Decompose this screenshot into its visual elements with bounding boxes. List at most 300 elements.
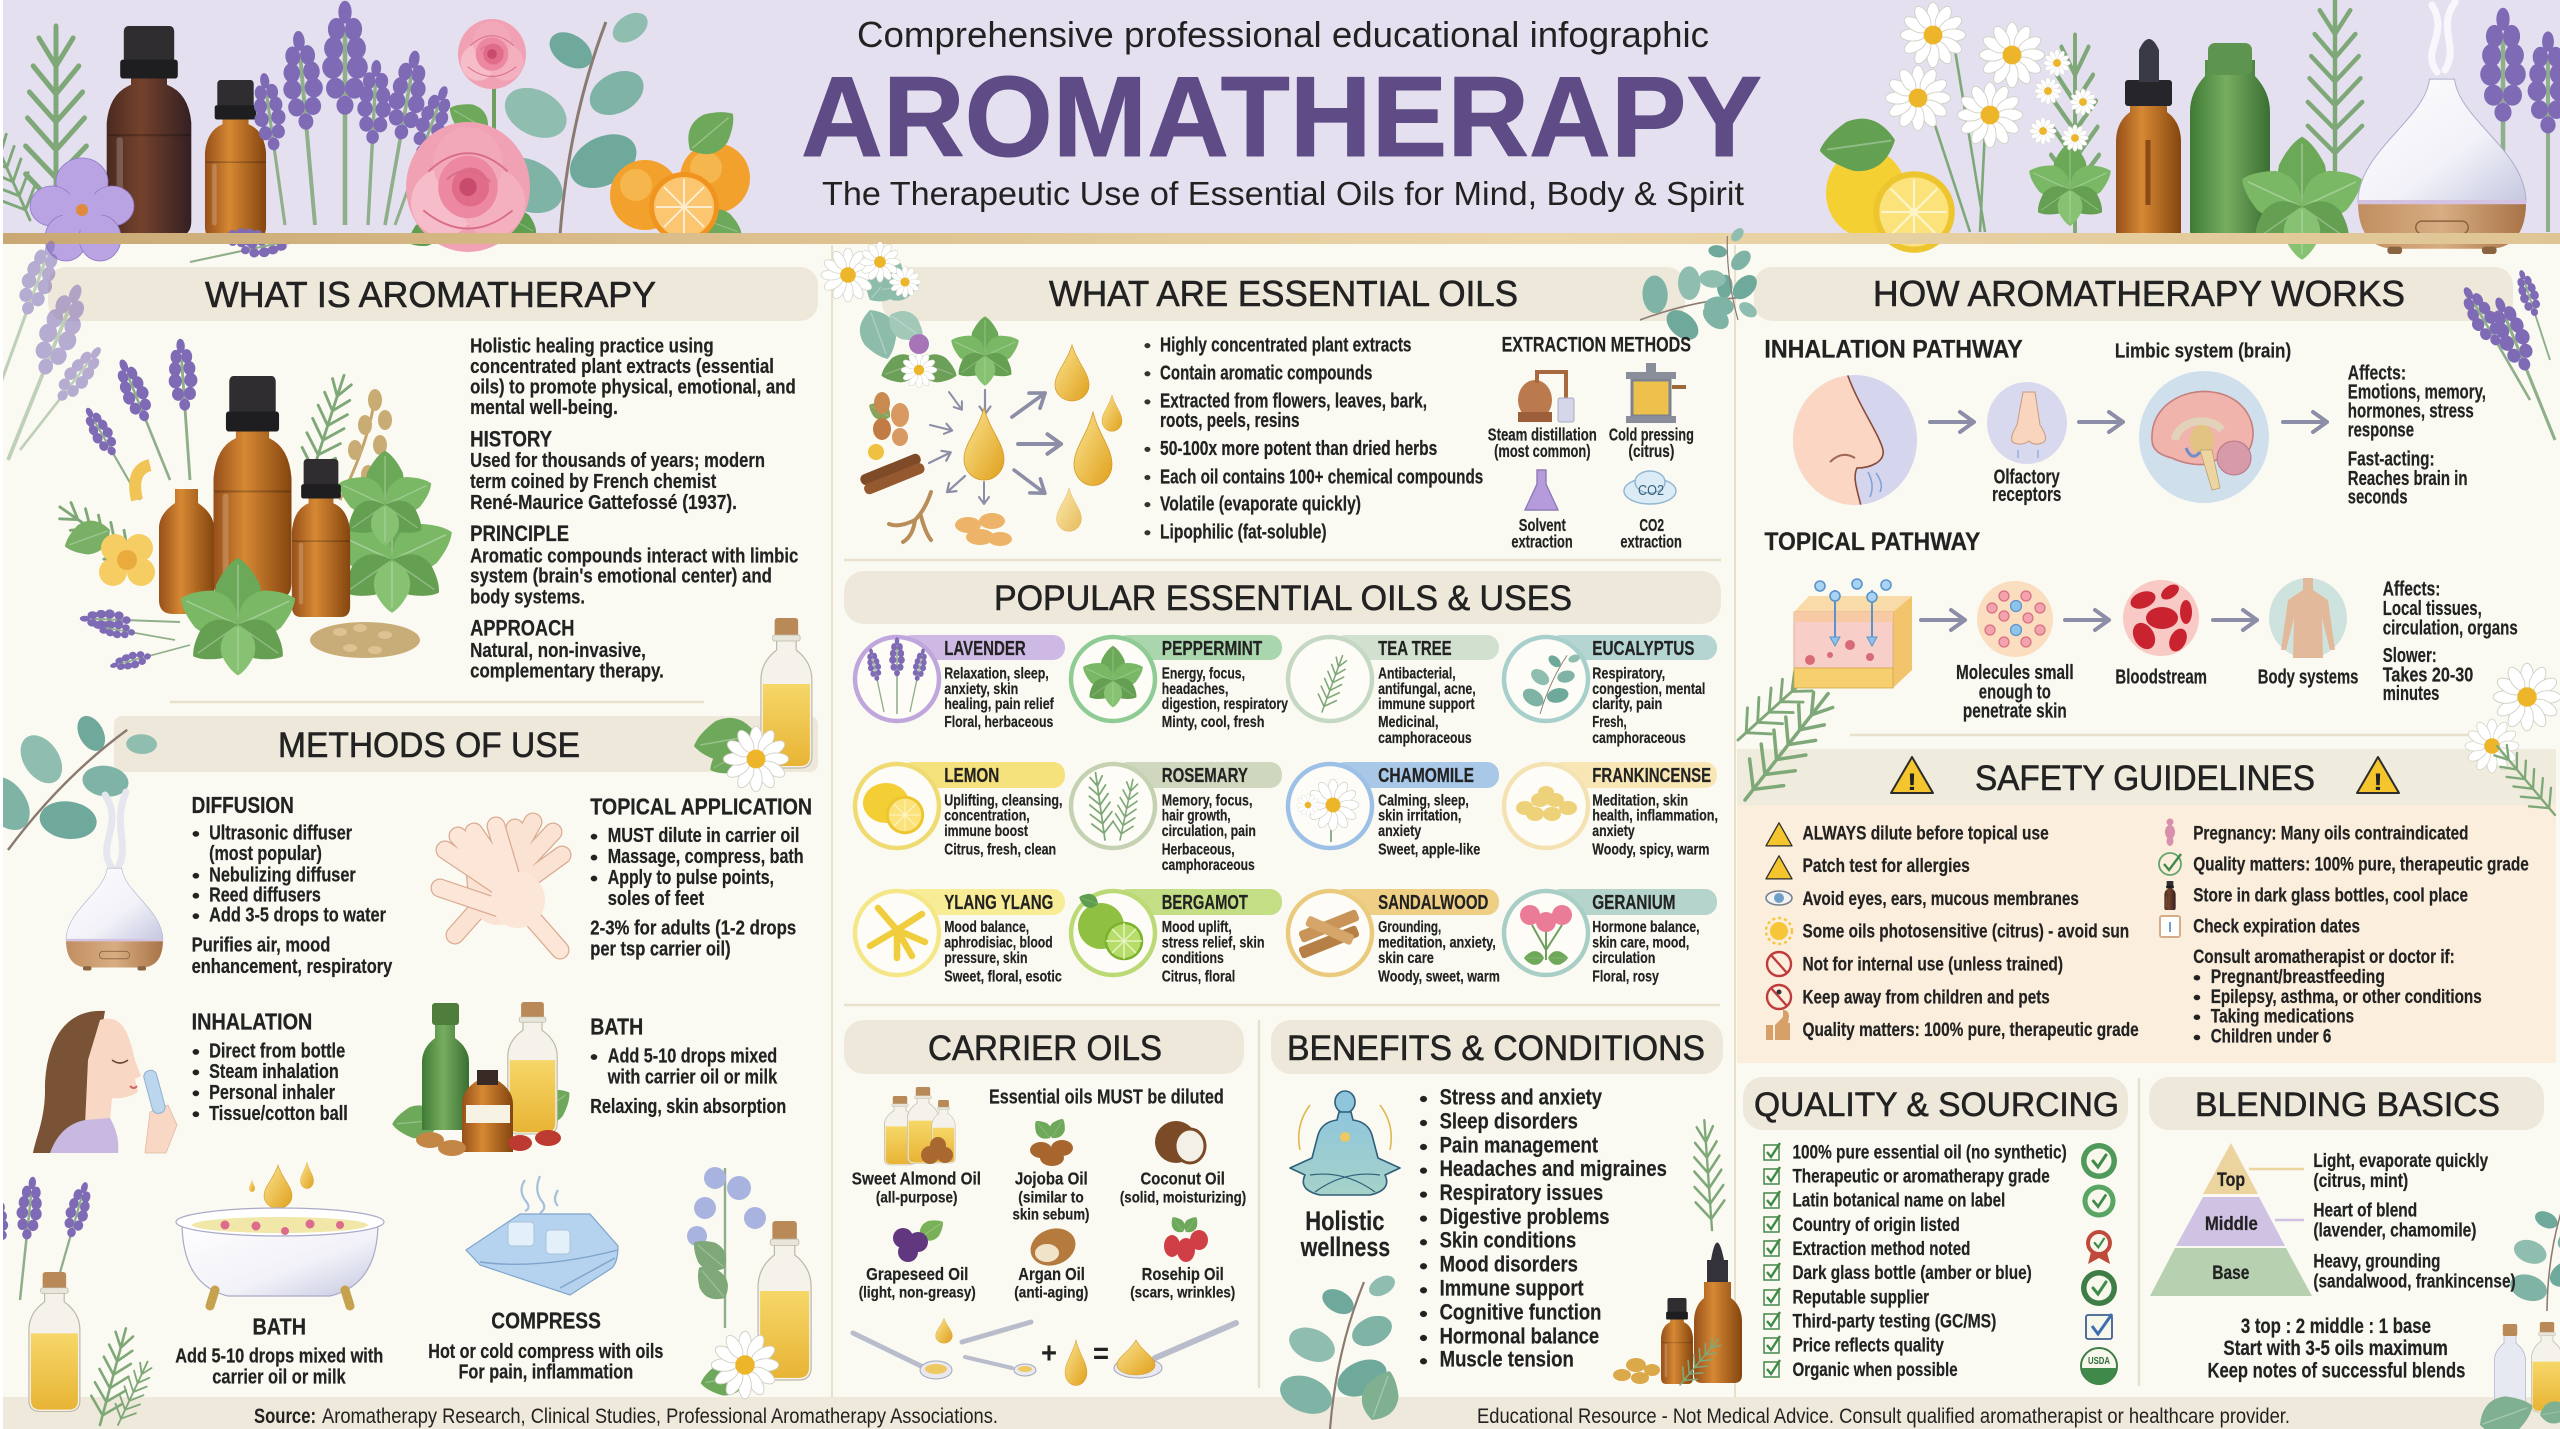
section heading: safety guidelines: SAFETY GUIDELINES	[1975, 759, 2315, 798]
card text: tea tree	[1378, 637, 1476, 747]
benefits text: Stress and anxiety	[1440, 1084, 1602, 1109]
pathway labels: seconds	[2348, 485, 2408, 508]
card text: frankincense	[1592, 764, 1718, 858]
text block: definition, history, principle, approach: HISTORY	[470, 427, 552, 452]
card text: lemon: Uplifting, cleansing,	[944, 791, 1062, 809]
blending text: (lavender, chamomile)	[2313, 1218, 2476, 1241]
blending text: Heavy, grounding	[2313, 1249, 2440, 1272]
main title: AROMATHERAPY	[801, 54, 1762, 181]
footer disclaimer: Educational Resource - Not Medical Advice. Consult qualified aromatherapist or healthcare provider.	[1477, 1405, 2290, 1428]
method: topical application: Massage, compress, bath	[608, 845, 804, 868]
card text: ylang ylang: Sweet, floral, esotic	[944, 967, 1062, 985]
card text: chamomile: anxiety	[1378, 822, 1421, 840]
card text: frankincense: Woody, spicy, warm	[1592, 840, 1709, 858]
pathway labels: receptors	[1992, 483, 2061, 505]
panel: carrier oils	[852, 1086, 1246, 1386]
card text: rosemary: Herbaceous,	[1162, 840, 1235, 858]
extraction labels: (citrus)	[1628, 443, 1674, 462]
section heading: safety guidelines	[1891, 757, 2399, 798]
text block: definition, history, principle, approach: term coined by French chemist	[470, 470, 717, 492]
card text: bergamot: conditions	[1162, 949, 1224, 967]
arrow	[2079, 412, 2123, 432]
icon: molecules	[1977, 581, 2053, 657]
icon: lavender	[864, 637, 930, 714]
card text: tea tree: TEA TREE	[1378, 637, 1452, 659]
carrier oil labels: (light, non-greasy)	[859, 1283, 976, 1301]
safety text: Avoid eyes, ears, mucous membranes	[1803, 887, 2079, 909]
panel: blending basics	[2150, 1143, 2516, 1383]
icon: eucalyptus	[1517, 643, 1582, 720]
pathway labels: Molecules small	[1956, 661, 2074, 683]
checklist text: Therapeutic or aromatherapy grade	[1792, 1164, 2050, 1187]
text block: definition, history, principle, approach: oils) to promote physical, emotional, and	[470, 375, 796, 398]
extraction labels: EXTRACTION METHODS	[1502, 332, 1691, 356]
safety text: Keep away from children and pets	[1803, 986, 2050, 1008]
card text: tea tree: immune support	[1378, 695, 1475, 713]
card text: lavender: Floral, herbaceous	[944, 713, 1053, 731]
topical pathway diagram	[1794, 578, 2347, 688]
card text: eucalyptus: clarity, pain	[1592, 695, 1662, 713]
dilution diagram: spoons: +	[1041, 1337, 1057, 1370]
extraction labels: Cold pressing	[1609, 426, 1694, 445]
card text: eucalyptus: Fresh,	[1592, 713, 1627, 731]
icon: three oil bottles	[884, 1087, 955, 1165]
card text: bergamot: BERGAMOT	[1162, 891, 1248, 913]
card text: lemon: Citrus, fresh, clean	[944, 840, 1056, 858]
icon: chamomile	[1297, 779, 1359, 842]
section heading: quality and sourcing: QUALITY & SOURCING	[1754, 1086, 2119, 1124]
icon: rosemary	[1085, 771, 1143, 842]
method caption: bath: BATH	[253, 1315, 306, 1340]
blending text: (citrus, mint)	[2313, 1169, 2408, 1191]
pathway labels: Limbic system (brain)	[2115, 339, 2291, 362]
benefits text: Muscle tension	[1440, 1347, 1574, 1372]
carrier oil labels: (solid, moisturizing)	[1120, 1188, 1246, 1206]
icon: cold press	[1626, 363, 1686, 423]
card text: tea tree: Medicinal,	[1378, 713, 1438, 731]
method caption: compress	[428, 1309, 663, 1383]
safety text: ALWAYS dilute before topical use	[1803, 821, 2049, 844]
method caption: bath	[175, 1315, 383, 1388]
icon: oil bottle with daisy	[690, 618, 812, 792]
section heading: what is aromatherapy: WHAT IS AROMATHERAPY	[205, 274, 656, 315]
carrier oil labels: (anti-aging)	[1014, 1283, 1088, 1301]
card text: ylang ylang: aphrodisiac, blood	[944, 933, 1053, 951]
method: diffusion: Reed diffusers	[209, 883, 321, 906]
card text: bergamot: Mood uplift,	[1162, 918, 1232, 936]
footer text	[254, 1405, 2290, 1428]
card text: bergamot: stress relief, skin	[1162, 933, 1265, 951]
benefits text: Hormonal balance	[1440, 1323, 1599, 1348]
bullet list: oil properties: Lipophilic (fat-soluble)	[1160, 520, 1327, 543]
text block: definition, history, principle, approach: APPROACH	[470, 617, 574, 641]
card text: sandalwood: Grounding,	[1378, 918, 1441, 936]
card text: sandalwood: SANDALWOOD	[1378, 891, 1488, 913]
method: topical application: soles of feet	[608, 886, 705, 910]
extraction labels: Steam distillation	[1488, 426, 1597, 445]
card text: eucalyptus: EUCALYPTUS	[1592, 637, 1694, 659]
carrier oil labels: (scars, wrinkles)	[1130, 1283, 1235, 1301]
panel: safety guidelines	[1766, 818, 2529, 1047]
text block: definition, history, principle, approach: PRINCIPLE	[470, 522, 569, 547]
card text: lavender	[944, 637, 1054, 731]
pathway labels: Olfactory	[1994, 465, 2060, 488]
left page margin	[0, 0, 3, 1429]
safety text: Patch test for allergies	[1803, 854, 1970, 876]
method: topical application: 2-3% for adults (1-2 drops	[590, 916, 796, 939]
method: topical application: MUST dilute in carrier oil	[608, 824, 799, 847]
pathway labels	[1764, 335, 2518, 722]
blending text: Start with 3-5 oils maximum	[2223, 1336, 2448, 1361]
text block: definition, history, principle, approach: Aromatic compounds interact with limbic	[470, 544, 798, 567]
card text: ylang ylang: Mood balance,	[944, 918, 1029, 936]
benefits text	[1300, 1084, 1667, 1372]
card text: peppermint: Minty, cool, fresh	[1162, 713, 1265, 731]
extraction labels	[1488, 332, 1694, 552]
method: diffusion: enhancement, respiratory	[192, 954, 393, 978]
method: diffusion	[192, 793, 393, 978]
blending text: Heart of blend	[2313, 1199, 2417, 1221]
safety text: Some oils photosensitive (citrus) - avoid sun	[1803, 920, 2129, 942]
card text: ylang ylang	[944, 891, 1062, 985]
arrow	[1921, 610, 1965, 630]
panel: what is aromatherapy	[50, 334, 812, 792]
icon: hands applying oil	[440, 822, 562, 950]
method: inhalation: Tissue/cotton ball	[209, 1101, 348, 1124]
card text: rosemary: circulation, pain	[1162, 822, 1256, 840]
text block: definition, history, principle, approach	[470, 334, 798, 682]
method: inhalation	[192, 1010, 348, 1124]
benefits text: Mood disorders	[1440, 1252, 1578, 1277]
section header bars	[48, 267, 2556, 1130]
text block: definition, history, principle, approach: concentrated plant extracts (essential	[470, 355, 774, 378]
carrier oil labels	[852, 1086, 1246, 1301]
panel: how aromatherapy works	[1764, 335, 2518, 722]
text block: definition, history, principle, approach: René-Maurice Gattefossé (1937).	[470, 491, 737, 513]
icon: woman inhaling	[33, 1011, 177, 1153]
card text: chamomile: CHAMOMILE	[1378, 764, 1474, 786]
icon: rosehip	[1164, 1214, 1208, 1262]
method caption: compress: Hot or cold compress with oils	[428, 1339, 663, 1362]
bullet list: oil properties: Highly concentrated plant extracts	[1160, 333, 1411, 356]
icon: lemon	[863, 783, 924, 834]
panel: quality and sourcing	[1764, 1140, 2117, 1385]
icon: bergamot	[1077, 891, 1142, 959]
card text: chamomile: skin irritation,	[1378, 806, 1461, 824]
icon: diffuser with steam	[66, 792, 163, 971]
card text: sandalwood: Woody, sweet, warm	[1378, 967, 1500, 985]
extraction labels: extraction	[1620, 533, 1682, 552]
method: bath: BATH	[590, 1015, 643, 1040]
section heading: how aromatherapy works: HOW AROMATHERAPY WORKS	[1873, 273, 2405, 314]
method: inhalation: Steam inhalation	[209, 1059, 339, 1083]
method: diffusion: Ultrasonic diffuser	[209, 821, 352, 844]
section heading: blending basics: BLENDING BASICS	[2195, 1086, 2500, 1124]
card text: chamomile	[1378, 764, 1481, 858]
card text: eucalyptus: camphoraceous	[1592, 729, 1686, 747]
checklist text: Price reflects quality	[1792, 1334, 1944, 1356]
icon: olfactory receptors	[1987, 382, 2067, 464]
icon: coconut	[1155, 1121, 1205, 1163]
diagram: plant sources to essential oil	[859, 316, 1122, 546]
card text: sandalwood	[1378, 891, 1500, 985]
card text: lemon: LEMON	[944, 764, 999, 786]
method: topical application: TOPICAL APPLICATION	[590, 795, 812, 820]
icon: meditation figure	[1290, 1091, 1400, 1195]
eyebrow line: Comprehensive professional educational infographic	[857, 14, 1709, 55]
pathway labels: response	[2348, 419, 2414, 441]
icon: right botanical group	[1816, 0, 2560, 260]
oil card pills	[900, 635, 1717, 915]
benefits text: Immune support	[1440, 1276, 1584, 1301]
method: diffusion: (most popular)	[209, 841, 322, 865]
gold shelf band	[0, 233, 2560, 244]
safety panel background	[1737, 749, 2556, 1063]
card text: peppermint: PEPPERMINT	[1162, 637, 1263, 659]
pathway labels: TOPICAL PATHWAY	[1764, 527, 1981, 555]
card text: lemon: immune boost	[944, 822, 1028, 840]
method: topical application: Apply to pulse points,	[608, 865, 774, 889]
pathway labels: Affects:	[2348, 361, 2406, 384]
safety text: Taking medications	[2211, 1004, 2354, 1027]
bullet list: oil properties: 50-100x more potent than dried herbs	[1160, 437, 1437, 460]
card text: peppermint	[1162, 637, 1288, 731]
bullet list: oil properties: Contain aromatic compounds	[1160, 361, 1372, 384]
icon: tea tree	[1313, 652, 1352, 715]
footer source: Aromatherapy Research, Clinical Studies, Professional Aromatherapy Associations.	[322, 1405, 998, 1428]
icon: ylang ylang	[870, 908, 925, 958]
section heading: popular essential oils: POPULAR ESSENTIAL OILS & USES	[994, 579, 1572, 618]
card text: bergamot: Citrus, floral	[1162, 967, 1235, 985]
card text: geranium	[1592, 891, 1700, 985]
card text: eucalyptus	[1592, 637, 1705, 747]
section heading: safety guidelines: !	[1907, 769, 1917, 796]
method: diffusion: Purifies air, mood	[192, 933, 330, 956]
safety text: Pregnant/breastfeeding	[2211, 965, 2385, 988]
pathway labels: Takes 20-30	[2383, 663, 2473, 686]
column dividers	[832, 245, 1735, 1397]
benefits text: Pain management	[1440, 1132, 1598, 1157]
benefits text: Holistic	[1305, 1206, 1384, 1236]
checklist text: Latin botanical name on label	[1792, 1189, 2005, 1211]
card text: sandalwood: skin care	[1378, 949, 1434, 967]
bullet list: oil properties: Each oil contains 100+ chemical compounds	[1160, 465, 1483, 488]
blending text: Top	[2217, 1168, 2245, 1191]
method caption: compress: COMPRESS	[491, 1309, 601, 1334]
carrier oil labels: (similar to	[1018, 1188, 1084, 1206]
checklist text: Country of origin listed	[1792, 1213, 1960, 1235]
carrier oil labels: Coconut Oil	[1141, 1169, 1225, 1189]
carrier oil labels: Sweet Almond Oil	[852, 1169, 981, 1189]
method: bath: Add 5-10 drops mixed	[608, 1044, 777, 1067]
checklist text: Organic when possible	[1792, 1358, 1958, 1380]
arrow	[2065, 610, 2109, 630]
carrier oil labels: Rosehip Oil	[1142, 1264, 1224, 1284]
section heading: safety guidelines: !	[2373, 769, 2383, 796]
header banner	[0, 0, 2560, 273]
oil card text	[944, 637, 1718, 985]
icon: bottles and nuts	[391, 1002, 579, 1156]
method caption: bath: carrier oil or milk	[212, 1365, 346, 1388]
card text: lavender: Relaxation, sleep,	[944, 664, 1049, 682]
method: diffusion: DIFFUSION	[192, 793, 294, 819]
extraction labels: Solvent	[1519, 516, 1566, 535]
benefits text: Skin conditions	[1440, 1228, 1576, 1253]
carrier oil labels: Argan Oil	[1018, 1264, 1085, 1284]
benefits text: Digestive problems	[1440, 1204, 1609, 1229]
card text: lemon	[944, 764, 1062, 858]
icon: sandalwood	[1298, 909, 1360, 959]
card text: lavender: healing, pain relief	[944, 695, 1054, 713]
arrow	[2283, 412, 2327, 432]
panel: popular essential oils grid	[855, 635, 1718, 985]
card text: geranium: Hormone balance,	[1592, 918, 1700, 936]
panel: what are essential oils	[859, 316, 1694, 552]
icon: jojoba	[1030, 1115, 1073, 1166]
pyramid chart	[2150, 1143, 2312, 1296]
blending text	[2205, 1149, 2516, 1383]
card text: rosemary	[1162, 764, 1256, 874]
safety icons	[1766, 818, 2181, 1040]
checklist text: Dark glass bottle (amber or blue)	[1792, 1261, 2032, 1284]
card text: sandalwood: meditation, anxiety,	[1378, 933, 1496, 951]
benefits text: wellness	[1300, 1232, 1390, 1262]
method: diffusion: Nebulizing diffuser	[209, 863, 356, 886]
pathway labels: Fast-acting:	[2348, 448, 2435, 470]
icon: limbic system brain	[2139, 371, 2269, 503]
blending text: Base	[2212, 1261, 2249, 1284]
checklist text	[1792, 1140, 2067, 1380]
method caption: compress: For pain, inflammation	[458, 1360, 633, 1383]
certification badges	[2081, 1143, 2117, 1385]
card text: eucalyptus: congestion, mental	[1592, 680, 1705, 698]
text block: definition, history, principle, approach: Holistic healing practice using	[470, 334, 714, 357]
benefits text: Sleep disorders	[1440, 1108, 1578, 1133]
card text: tea tree: Antibacterial,	[1378, 664, 1456, 682]
card text: rosemary: hair growth,	[1162, 806, 1231, 824]
icon: CO2 cloud: CO2	[1638, 482, 1664, 499]
certification badges: USDA	[2088, 1356, 2110, 1367]
pathway labels: minutes	[2383, 682, 2439, 704]
section heading: benefits and conditions: BENEFITS & CONDITIONS	[1287, 1029, 1705, 1068]
safety text	[1803, 821, 2529, 1047]
icon: solvent flask	[1525, 470, 1558, 510]
card text: peppermint: digestion, respiratory	[1162, 695, 1288, 713]
carrier oil labels: Essential oils MUST be diluted	[989, 1086, 1224, 1108]
card text: rosemary: Memory, focus,	[1162, 791, 1252, 809]
card text: tea tree: antifungal, acne,	[1378, 680, 1476, 698]
checklist text: 100% pure essential oil (no synthetic)	[1792, 1140, 2067, 1163]
extraction methods	[1488, 332, 1694, 552]
method: topical application	[590, 795, 812, 960]
text block: definition, history, principle, approach: body systems.	[470, 585, 585, 608]
card text: geranium: skin care, mood,	[1592, 933, 1689, 951]
card text: lavender: anxiety, skin	[944, 680, 1018, 698]
text block: definition, history, principle, approach: Used for thousands of years; modern	[470, 449, 765, 471]
icon: grapes	[893, 1214, 948, 1262]
pathway labels: Body systems	[2258, 665, 2358, 688]
safety text: Children under 6	[2211, 1025, 2331, 1047]
icon: bloodstream	[2123, 580, 2199, 656]
extraction labels: CO2	[1639, 516, 1664, 535]
dilution diagram: spoons: =	[1093, 1337, 1109, 1370]
panel: methods of use	[33, 792, 812, 1388]
benefits text: Cognitive function	[1440, 1299, 1601, 1324]
icon: nose profile	[1793, 375, 1917, 505]
safety text: Not for internal use (unless trained)	[1803, 953, 2063, 975]
pathway labels: INHALATION PATHWAY	[1764, 335, 2023, 363]
method: bath: Relaxing, skin absorption	[590, 1094, 786, 1117]
dilution diagram: spoons	[853, 1318, 1236, 1386]
card text: frankincense: anxiety	[1592, 822, 1635, 840]
card text: rosemary: ROSEMARY	[1162, 764, 1248, 786]
title block	[801, 14, 1762, 212]
arrow	[2213, 610, 2257, 630]
carrier oil labels: skin sebum)	[1013, 1205, 1089, 1223]
bullet list: oil properties: roots, peels, resins	[1160, 409, 1300, 432]
method: inhalation: Personal inhaler	[209, 1080, 335, 1104]
card text: tea tree: camphoraceous	[1378, 729, 1472, 747]
blending text: 3 top : 2 middle : 1 base	[2241, 1314, 2431, 1339]
icon: CO2 cloud	[1624, 471, 1676, 504]
card text: lavender: LAVENDER	[944, 637, 1026, 659]
section heading: carrier oils: CARRIER OILS	[928, 1029, 1162, 1068]
carrier oil labels: Jojoba Oil	[1015, 1169, 1088, 1189]
card text: chamomile: Sweet, apple-like	[1378, 840, 1481, 858]
method: topical application: per tsp carrier oil)	[590, 937, 731, 960]
icon: argan	[1025, 1222, 1081, 1272]
card text: rosemary: camphoraceous	[1162, 856, 1255, 874]
icon: body systems	[2269, 578, 2347, 658]
icon: geranium	[1520, 905, 1572, 965]
method: bath	[590, 1015, 786, 1117]
arrow	[1930, 412, 1974, 432]
card text: peppermint: Energy, focus,	[1162, 664, 1245, 682]
checklist text: Reputable supplier	[1792, 1285, 1929, 1308]
footer band	[0, 1397, 2560, 1429]
checklist checkboxes	[1764, 1143, 1780, 1377]
card text: frankincense: Meditation, skin	[1592, 791, 1688, 809]
blending text: Middle	[2205, 1212, 2258, 1234]
bullet list: oil properties: Extracted from flowers, leaves, bark,	[1160, 389, 1427, 412]
card text: frankincense: FRANKINCENSE	[1592, 764, 1711, 786]
oil icon rings	[855, 637, 1588, 975]
card text: chamomile: Calming, sleep,	[1378, 791, 1469, 809]
text block: definition, history, principle, approach: complementary therapy.	[470, 659, 664, 682]
card text: eucalyptus: Respiratory,	[1592, 664, 1665, 682]
pathway labels: Bloodstream	[2115, 665, 2207, 688]
icon: peppermint	[1078, 646, 1148, 707]
section heading: methods of use: METHODS OF USE	[278, 726, 580, 765]
method: inhalation: Direct from bottle	[209, 1039, 345, 1062]
method: diffusion: Add 3-5 drops to water	[209, 903, 386, 926]
bullet list: oil properties: Volatile (evaporate quickly)	[1160, 492, 1361, 515]
text block: definition, history, principle, approach: system (brain's emotional center) and	[470, 564, 772, 587]
card text: ylang ylang: YLANG YLANG	[944, 891, 1053, 913]
illustration: bottles and herbs	[50, 338, 461, 675]
extraction labels: (most common)	[1494, 443, 1591, 462]
checklist text: Extraction method noted	[1792, 1237, 1970, 1259]
icon: bathtub with drops	[176, 1162, 384, 1306]
pathway labels: enough to	[1979, 680, 2051, 703]
inhalation pathway diagram	[1785, 370, 2327, 510]
text block: definition, history, principle, approach: mental well-being.	[470, 396, 618, 419]
card text: geranium: circulation	[1592, 949, 1655, 967]
card text: ylang ylang: pressure, skin	[944, 949, 1027, 967]
method: bath: with carrier oil or milk	[607, 1065, 778, 1088]
benefits text: Respiratory issues	[1440, 1180, 1603, 1205]
icon: still	[1518, 372, 1574, 422]
